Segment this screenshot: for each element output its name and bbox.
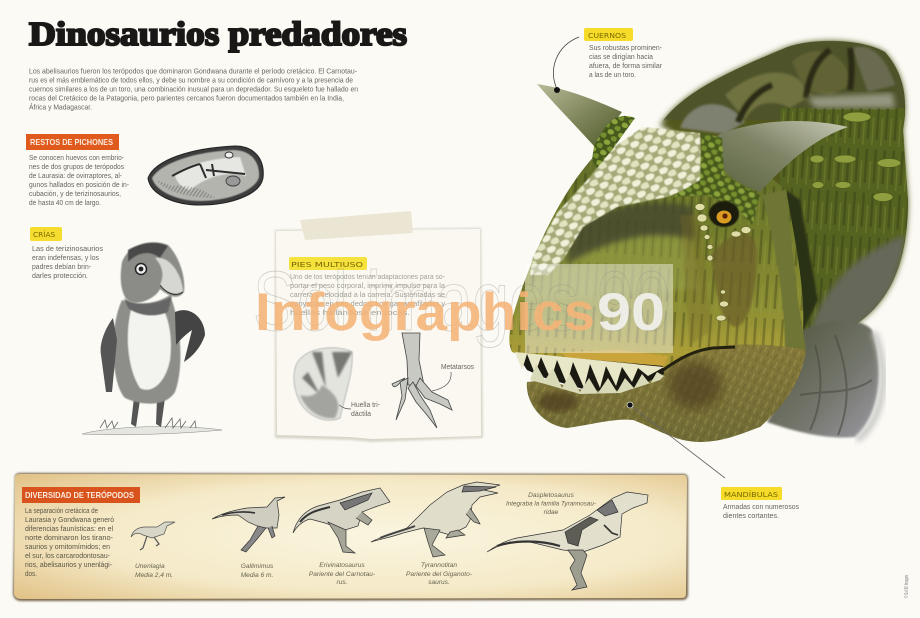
icon: metatarsus foot bones <box>392 333 452 428</box>
panel background <box>13 473 688 601</box>
caption: erivinatosaurus: rus. <box>336 579 348 586</box>
icon: tridactyl footprint <box>294 348 352 420</box>
callout dot: mandíbulas <box>627 402 633 408</box>
heading: pies multiuso: PIES MULTIUSO <box>291 260 363 269</box>
heading: crías: CRÍAS <box>33 230 56 239</box>
text: mandíbulas <box>723 504 799 520</box>
dinosaur: gallimimus <box>212 497 285 552</box>
text: crías: darles protección. <box>32 273 88 280</box>
caption: daspletosaurus: Integraba la familia Tyrannosau- <box>506 500 597 508</box>
caption: tyrannotitan: Tyrannotitan <box>421 562 457 569</box>
intro text: cuernos similares a los de un toro, una combinación inusual para un depredador. Su esqueleto fue hallado en <box>29 86 358 94</box>
text: pies multiuso: apoyaban en tres dedos, con garras afiladas y <box>290 301 446 308</box>
text: diversidad: rios, abelisaurios y unenlági- <box>25 562 113 569</box>
text: restos de pichones: Se conocen huevos con embrio- <box>29 155 125 162</box>
shoulder <box>767 321 883 440</box>
face beads <box>695 204 751 321</box>
text: cuernos: Sus robustas prominen- <box>589 45 663 52</box>
callout line: cuernos <box>553 37 579 89</box>
text: cuernos: afuera, de forma similar <box>589 63 663 70</box>
watermark outline text: Sol images 90 <box>253 254 670 348</box>
title: Dinosaurios predadores <box>29 16 407 53</box>
text: restos de pichones: gunos hallados en posición de in- <box>29 182 130 189</box>
panel: pies multiuso note <box>275 211 483 442</box>
text: crías <box>32 246 104 280</box>
intro text: Los abelisaurios fueron los terópodos que dominaron Gondwana durante el período cretácico. El Carnotau- <box>29 68 358 76</box>
text: restos de pichones: nes de dos grupos de terópodos <box>29 164 124 171</box>
text: pies multiuso: huellas hallándose en rocas. <box>290 310 410 317</box>
text: diversidad <box>25 508 114 578</box>
text: crías: padres debían brin- <box>32 264 92 271</box>
watermark orange text: Infographics <box>255 283 595 342</box>
text: diversidad: diferencias faunísticas: en el <box>25 526 113 533</box>
text: mandíbulas: dientes cortantes. <box>723 513 779 520</box>
icon: baby theropod sketch <box>82 242 222 435</box>
eye <box>709 201 739 227</box>
text: cuernos: cias se dirigían hacia <box>589 54 653 61</box>
panel: crías <box>30 227 222 435</box>
heading: mandíbulas <box>721 487 782 500</box>
callout: mandíbulas <box>627 402 799 520</box>
intro text: África y Madagascar. <box>29 102 92 112</box>
tape <box>300 211 413 240</box>
caption: daspletosaurus: ridae <box>544 509 559 516</box>
text: crías: eran indefensas, y los <box>32 255 99 262</box>
heading: restos de pichones <box>26 134 119 150</box>
intro text: rocas del Cretácico de la Patagonia, pero parientes cercanos fueron documentados también en la India, <box>29 96 344 102</box>
caption: tyrannotitan: Pariente del Giganoto- <box>406 571 473 578</box>
text: diversidad: saurios y ornitomímidos; en <box>25 544 110 551</box>
label: huella tridáctila <box>351 402 381 418</box>
caption: erivinatosaurus: Pariente del Carnotau- <box>309 571 376 578</box>
note paper <box>275 228 483 442</box>
text: pies multiuso: portar el peso corporal, imprimir impulso para la <box>290 283 445 290</box>
caption: tyrannotitan <box>406 562 473 586</box>
callout line: metatarsos <box>432 372 451 391</box>
face <box>509 135 806 372</box>
watermark <box>253 254 673 353</box>
text: mandíbulas: Armadas con numerosos <box>723 504 799 511</box>
illustration: carnotaurus head <box>509 40 910 442</box>
crest scales <box>530 127 702 275</box>
intro text: rus es el más emblemático de todos ellos, y debe su nombre a su condición de carnívoro y a la presencia de <box>29 78 353 84</box>
dinosaur: tyrannotitan <box>371 482 500 557</box>
lower jaw <box>527 344 806 442</box>
caption: gallimimus <box>241 563 274 579</box>
text: restos de pichones: de Laurasia: de ovirraptores, al- <box>29 173 123 180</box>
text: restos de pichones: cubación, y de terizinosaurios, <box>29 191 121 198</box>
heading: mandíbulas: MANDÍBULAS <box>724 490 778 499</box>
caption: erivinatosaurus <box>309 562 376 586</box>
text: diversidad: norte dominaron los tirano- <box>25 535 114 542</box>
heading: diversidad de terópodos <box>22 487 140 503</box>
dinosaur: erivinatosaurus <box>293 488 390 553</box>
caption: daspletosaurus: Daspletosaurus <box>528 492 575 499</box>
callout: cuernos <box>553 28 663 93</box>
text: restos de pichones <box>29 155 130 207</box>
heading: crías <box>30 227 62 241</box>
text: pies multiuso: Uno de los terópodos tenían adaptaciones para so- <box>290 274 446 281</box>
watermark panel <box>525 264 673 353</box>
neck and body <box>660 40 910 348</box>
text: pies multiuso <box>290 274 446 317</box>
panel: restos de pichones <box>26 134 263 207</box>
dinosaur: unenlagia <box>131 522 175 550</box>
text: cuernos: a las de un toro. <box>589 72 636 79</box>
caption: erivinatosaurus: Erivinatosaurus <box>319 562 365 569</box>
caption: unenlagia <box>135 563 173 579</box>
text: diversidad: el sur, los carcarodontosau- <box>25 553 111 560</box>
watermark number: 90 <box>597 283 665 342</box>
caption: gallimimus: Media 6 m. <box>241 572 273 579</box>
icon: fossil egg sketch <box>148 146 263 205</box>
heading: pies multiuso <box>289 257 367 270</box>
text: diversidad: Laurasia y Gondwana generó <box>25 517 114 524</box>
caption: unenlagia: Unenlagia <box>135 563 165 570</box>
credit: © Sol 90 Images <box>903 575 910 598</box>
heading: restos de pichones: RESTOS DE PICHONES <box>30 137 113 147</box>
text: cuernos <box>589 45 663 79</box>
caption: tyrannotitan: saurus. <box>428 579 450 586</box>
green scales around horn and eye <box>672 133 760 225</box>
teeth <box>515 352 664 394</box>
label: metatarsos: Metatarsos <box>441 364 474 371</box>
text: pies multiuso: carrera y velocidad a la carrera. Sustentadas se <box>290 292 445 299</box>
text: restos de pichones: de hasta 40 cm de largo. <box>29 200 101 207</box>
text: diversidad: La separación cretácica de <box>25 508 98 515</box>
callout line: mandíbulas <box>630 405 725 478</box>
label: huella tridáctila: Huella tri- <box>351 402 381 409</box>
heading: cuernos: CUERNOS <box>588 31 626 40</box>
intro text <box>29 68 358 112</box>
oval body scales <box>810 112 901 202</box>
callout dot: cuernos <box>554 87 560 93</box>
caption: gallimimus: Gallimimus <box>241 563 274 570</box>
text: crías: Las de terizinosaurios <box>32 246 104 253</box>
label: huella tridáctila: dáctila <box>351 411 371 418</box>
horn left <box>537 84 635 168</box>
text: diversidad: dos. <box>25 571 37 578</box>
panel: diversidad de terópodos <box>13 473 688 601</box>
horn right <box>718 121 848 192</box>
caption: daspletosaurus <box>506 492 597 516</box>
caption: unenlagia: Media 2,4 m. <box>135 572 173 579</box>
heading: diversidad de terópodos: DIVERSIDAD DE TERÓPODOS <box>25 489 134 500</box>
dinosaur: daspletosaurus <box>487 492 648 590</box>
